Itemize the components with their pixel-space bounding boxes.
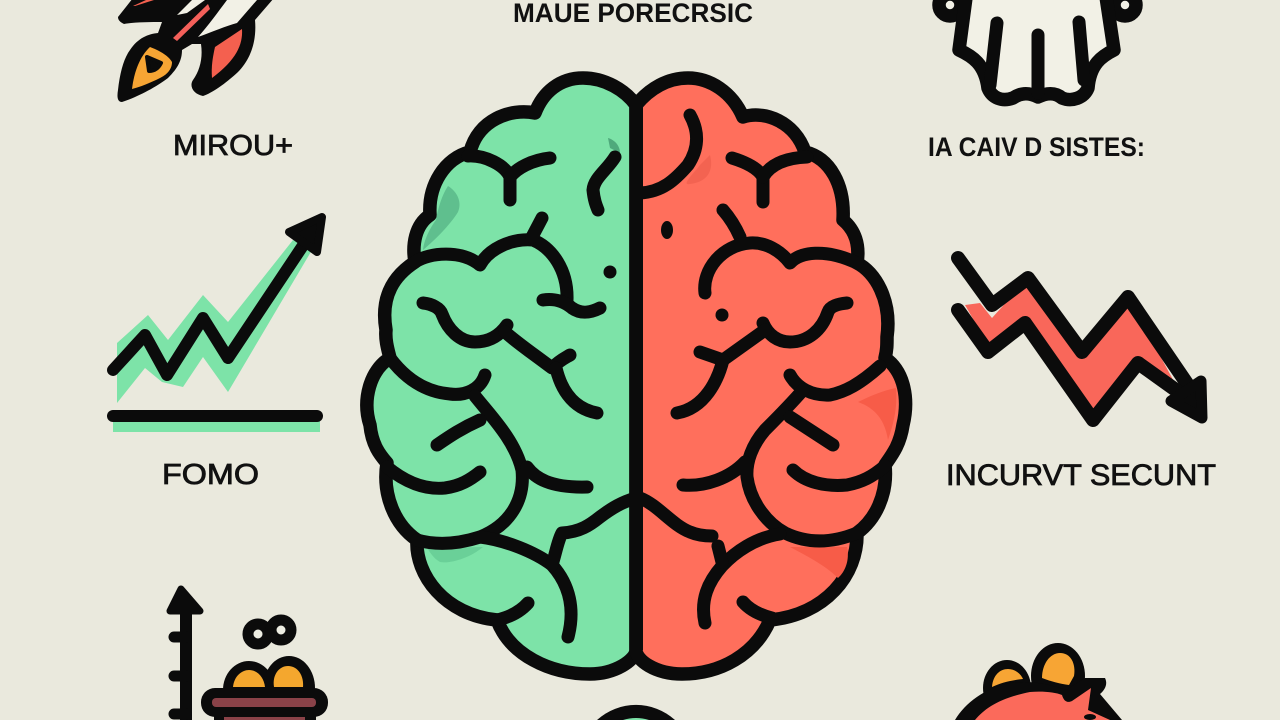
icon: bottom centre circle xyxy=(597,705,675,720)
icon: growth axis with arrow xyxy=(170,589,200,720)
brain right hemisphere xyxy=(636,78,906,674)
icon: piggy bank with coins xyxy=(955,643,1122,720)
icon: infinity symbol xyxy=(248,620,291,644)
icon: rising chart xyxy=(113,217,322,432)
icon: falling chart xyxy=(958,258,1202,420)
brain centre divider xyxy=(630,100,643,650)
brain left hemisphere xyxy=(367,78,636,674)
icon: hand xyxy=(939,0,1136,100)
icon: rocket xyxy=(117,0,274,102)
label: right upper: IA CAIV D SISTES: xyxy=(928,132,1145,162)
label: left upper: MIROU+ xyxy=(173,130,293,162)
icon: brain xyxy=(367,78,906,674)
label: right middle: INCURVT SECUNT xyxy=(946,459,1216,492)
icon: coin basket xyxy=(201,656,328,720)
label: FOMO: FOMO xyxy=(162,459,259,491)
